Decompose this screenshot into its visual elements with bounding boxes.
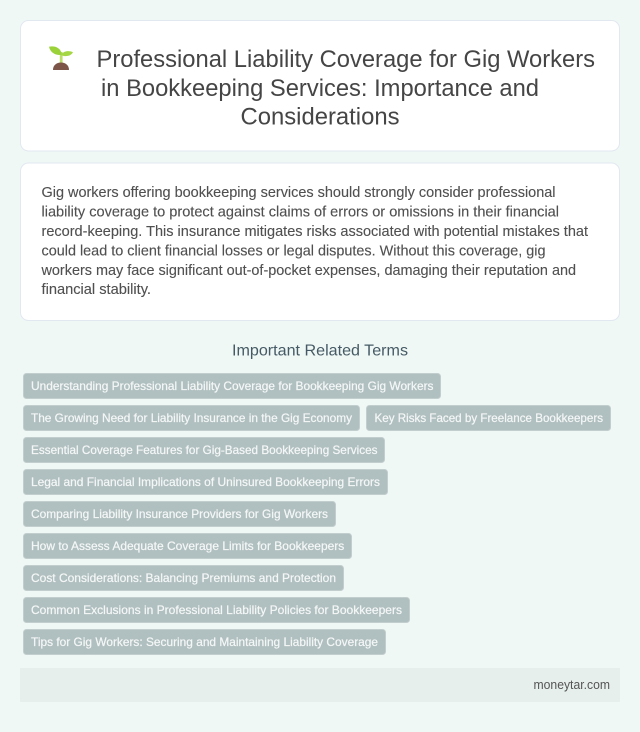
tag: common exclusions: Common Exclusions in Professional Liability Policies for Bookkeepers <box>31 603 402 617</box>
text block: summary paragraph: Gig workers offering bookkeeping services should strongly consider professional <box>42 185 556 201</box>
tag: understanding coverage: Understanding Professional Liability Coverage for Bookkeeping Gig Workers <box>31 379 434 393</box>
text block: summary paragraph: record-keeping. This insurance mitigates risks associated with potential mistakes that <box>42 224 588 240</box>
tag: common exclusions <box>24 598 410 622</box>
text block: summary paragraph: financial stability. <box>42 282 151 298</box>
tag: comparing providers <box>24 502 336 526</box>
tag: key risks <box>366 406 610 430</box>
tag: key risks: Key Risks Faced by Freelance Bookkeepers <box>374 411 603 425</box>
title <box>96 46 595 131</box>
tag: coverage limits: How to Assess Adequate Coverage Limits for Bookkeepers <box>31 539 344 553</box>
tag: understanding coverage <box>24 374 440 398</box>
tag: essential features <box>24 438 384 462</box>
text block: summary paragraph: could lead to client financial losses or legal disputes. Without this coverage, gig <box>42 243 546 259</box>
tag: cost considerations: Cost Considerations: Balancing Premiums and Protection <box>31 571 336 585</box>
panel: title card <box>20 20 620 151</box>
icon: seedling <box>49 46 73 70</box>
panel: summary card <box>20 163 620 320</box>
tag: legal implications: Legal and Financial Implications of Uninsured Bookkeeping Errors <box>31 475 380 489</box>
title: Considerations <box>240 104 400 131</box>
tag: essential features: Essential Coverage Features for Gig-Based Bookkeeping Services <box>31 443 378 457</box>
tag: coverage limits <box>24 534 352 558</box>
tag list: related terms <box>24 374 610 654</box>
tag: comparing providers: Comparing Liability Insurance Providers for Gig Workers <box>31 507 328 521</box>
tag: legal implications <box>24 470 388 494</box>
tag: growing need <box>24 406 360 430</box>
tag: growing need: The Growing Need for Liability Insurance in the Gig Economy <box>31 411 352 425</box>
tag: tips: Tips for Gig Workers: Securing and Maintaining Liability Coverage <box>31 635 378 649</box>
footer <box>20 668 620 702</box>
title: Professional Liability Coverage for Gig Workers <box>96 46 595 73</box>
text block: summary paragraph: workers may face significant out-of-pocket expenses, damaging their reputation and <box>40 263 576 279</box>
title: in Bookkeeping Services: Importance and <box>101 75 539 102</box>
heading: important related terms: Important Related Terms <box>232 342 408 360</box>
tag: cost considerations <box>24 566 344 590</box>
text block: summary paragraph <box>40 185 588 298</box>
tag: tips <box>24 630 386 654</box>
footer: site name: moneytar.com <box>534 677 610 692</box>
text block: summary paragraph: liability coverage to protect against claims of errors or omissions in their financial <box>42 204 559 220</box>
